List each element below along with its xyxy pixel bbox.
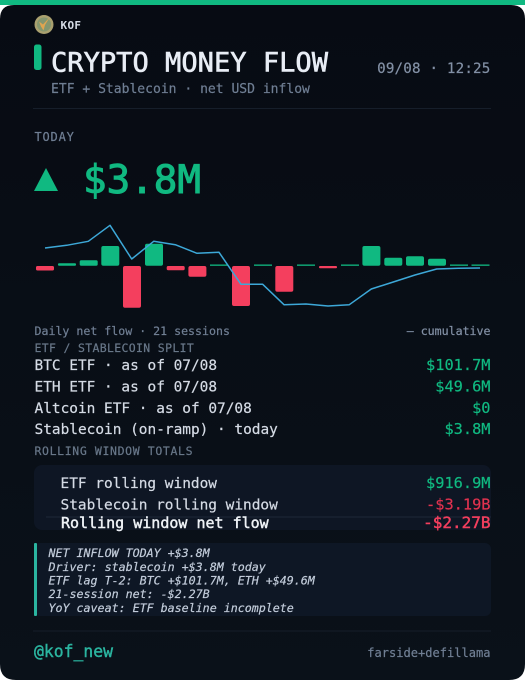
date and time: 09/08 · 12:25 <box>377 61 490 77</box>
callout text: 21-session net: -$2.27B <box>48 587 210 601</box>
title accent <box>34 44 42 70</box>
row: Altcoin ETF <box>34 399 490 417</box>
callout: summary <box>34 543 491 616</box>
panel: rolling window totals <box>34 465 491 532</box>
row: Stablecoin rolling <box>60 496 490 514</box>
callout text: ETF lag T-2: BTC +$101.7M, ETH +$49.6M <box>48 574 316 588</box>
daily flow bars <box>36 244 490 308</box>
row: Stablecoin rolling: Stablecoin rolling window <box>60 498 278 514</box>
section heading: split: ETF / STABLECOIN SPLIT <box>34 341 194 355</box>
row: net flow: -$2.27B <box>423 513 490 532</box>
icon: avatar <box>34 15 54 34</box>
row: BTC ETF <box>34 356 490 374</box>
row: Stablecoin: $3.8M <box>444 420 490 438</box>
chart: daily net flow bars and cumulative line <box>36 225 490 308</box>
row: net flow: Rolling window net flow <box>61 514 270 532</box>
row: Stablecoin: Stablecoin (on-ramp) · today <box>34 422 278 438</box>
top accent bar <box>0 0 525 5</box>
callout text: Driver: stablecoin +$3.8M today <box>48 560 266 574</box>
callout text <box>48 546 316 615</box>
today amount: $3.8M <box>83 158 201 203</box>
row: Stablecoin <box>34 420 490 438</box>
chart caption: Daily net flow · 21 sessions <box>34 324 230 338</box>
row: BTC ETF: BTC ETF · as of 07/08 <box>34 358 217 374</box>
row: Altcoin ETF: $0 <box>472 399 490 417</box>
row: Altcoin ETF: Altcoin ETF · as of 07/08 <box>34 401 252 417</box>
row: ETH ETF: $49.6M <box>435 378 490 396</box>
row: ETH ETF: ETH ETF · as of 07/08 <box>34 380 217 396</box>
brand header <box>34 15 81 34</box>
row: ETF rolling: $916.9M <box>426 474 490 492</box>
footer source: farside+defillama <box>367 646 490 660</box>
callout text: YoY caveat: ETF baseline incomplete <box>48 601 294 615</box>
callout text: NET INFLOW TODAY +$3.8M <box>48 546 211 560</box>
footer handle: @kof_new <box>34 642 113 661</box>
split rows <box>34 356 490 438</box>
row: ETF rolling <box>60 474 490 492</box>
row: net flow <box>61 513 490 532</box>
section heading: rolling: ROLLING WINDOW TOTALS <box>34 444 193 458</box>
icon: up triangle <box>34 168 58 191</box>
subtitle: ETF + Stablecoin · net USD inflow <box>51 82 310 97</box>
cumulative line <box>45 225 480 306</box>
today value <box>34 158 201 203</box>
row: ETF rolling: ETF rolling window <box>60 476 217 492</box>
today label: TODAY <box>34 130 75 144</box>
chart legend: — cumulative <box>407 324 491 338</box>
brand name: KOF <box>60 19 81 32</box>
row: Stablecoin rolling: -$3.19B <box>426 496 490 514</box>
title: CRYPTO MONEY FLOW <box>51 48 329 78</box>
row: ETH ETF <box>34 378 490 396</box>
row: BTC ETF: $101.7M <box>426 356 490 374</box>
